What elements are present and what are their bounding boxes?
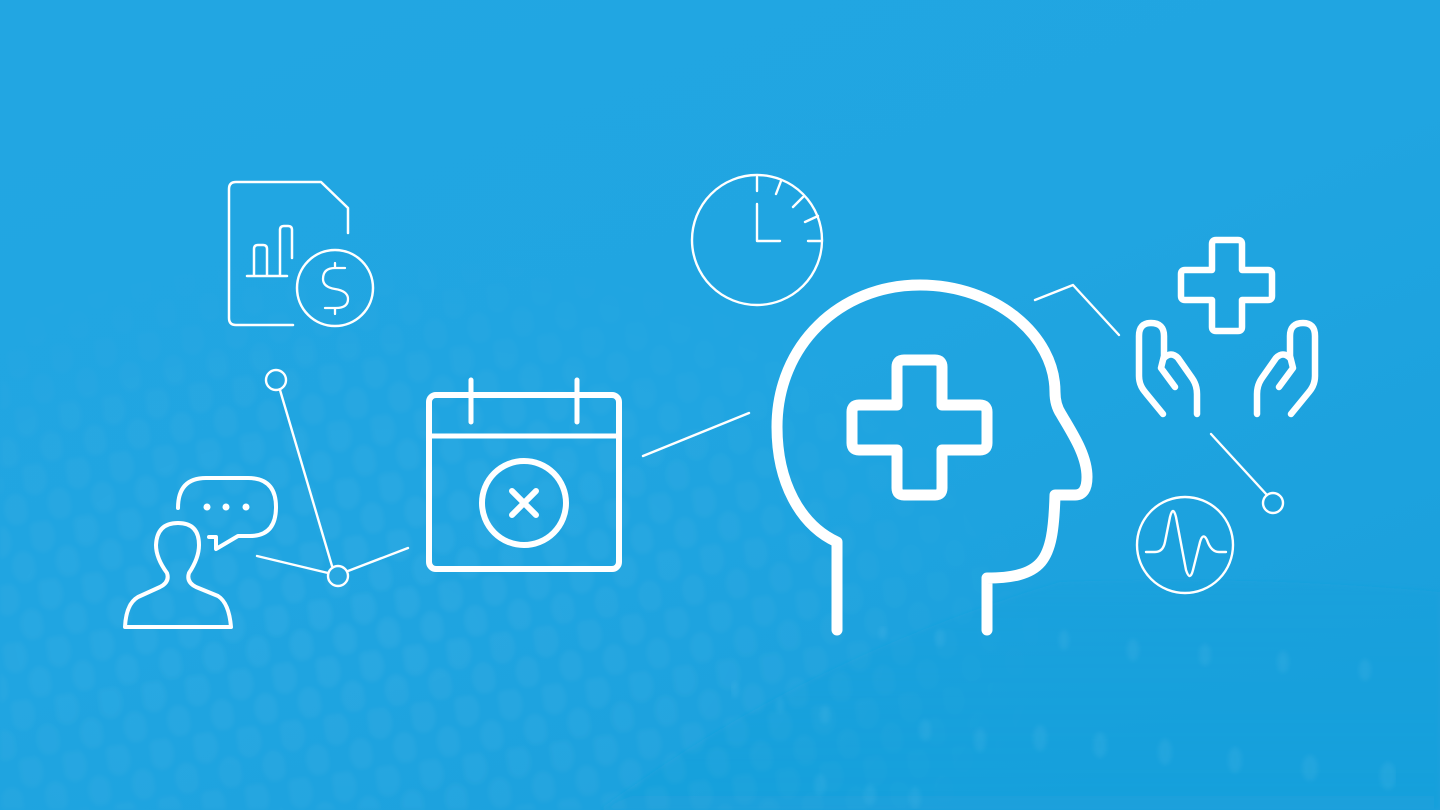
icon: clock bbox=[692, 175, 822, 305]
icon: financial document with dollar coin bbox=[229, 182, 373, 326]
connector: head to hands bbox=[1035, 285, 1119, 335]
icon: calendar with cancel mark bbox=[429, 380, 619, 569]
infographic canvas bbox=[123, 174, 1440, 810]
icon: head with medical cross bbox=[777, 285, 1087, 630]
icon: person with speech bubble bbox=[125, 478, 276, 627]
connector: calendar to head bbox=[643, 413, 749, 456]
icon: caring hands bbox=[1139, 323, 1315, 414]
icon: heartbeat pulse bbox=[1137, 497, 1233, 593]
icon: small medical cross bbox=[1181, 240, 1272, 331]
connector: hands to node bbox=[1211, 434, 1283, 513]
connector: node network on the left bbox=[257, 370, 408, 586]
